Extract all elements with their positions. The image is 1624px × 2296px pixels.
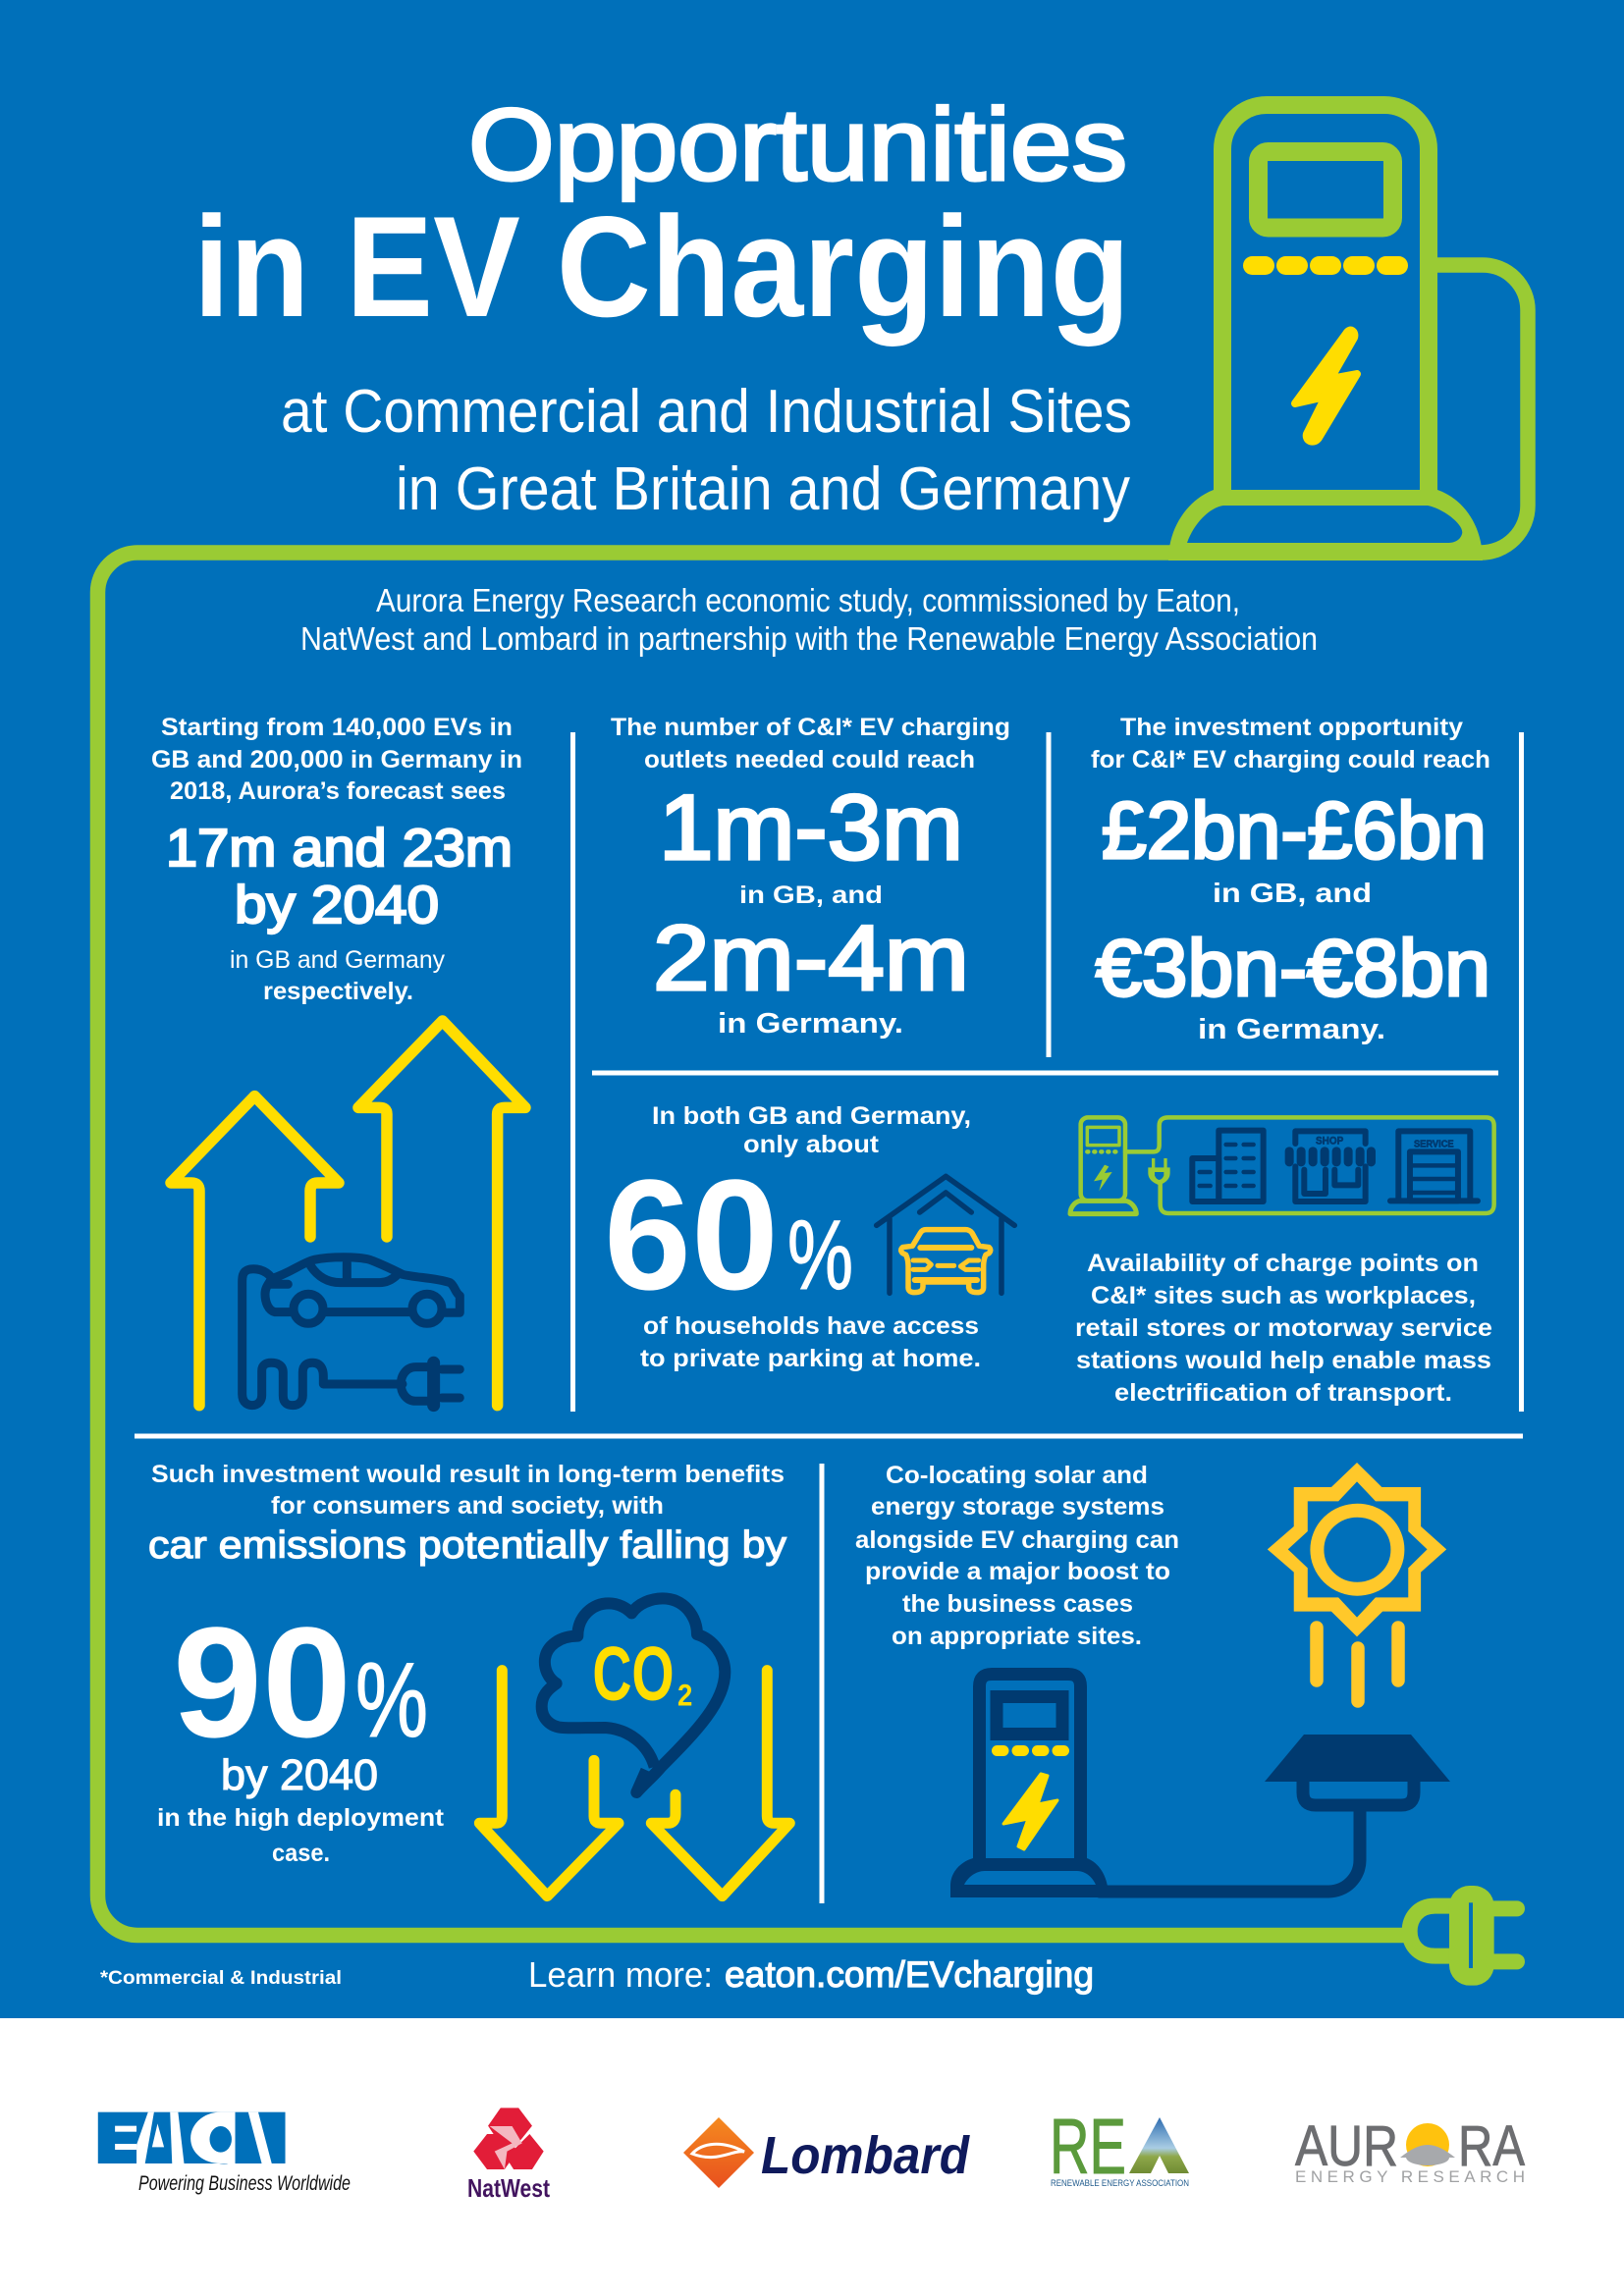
emissions intro: [148, 1461, 787, 1567]
emissions intro: Such investment would result in long-term benefits: [151, 1461, 785, 1488]
logo: REA: RENEWABLE ENERGY ASSOCIATION: [1051, 2178, 1189, 2188]
logo: NatWest: NatWest: [467, 2173, 550, 2203]
charging cable and plug: [243, 1269, 460, 1406]
down arrows: [479, 1671, 789, 1896]
service station: [1390, 1131, 1478, 1201]
learn more link: Learn more:: [528, 1954, 713, 1995]
GB outlets figure: 1m-3m: [659, 775, 963, 879]
CO2 label: 2: [677, 1678, 692, 1713]
logo: Aurora: RA: [1458, 2114, 1525, 2178]
logo: REA: RE: [1050, 2103, 1126, 2190]
logo: Aurora: ENERGY RESEARCH: [1295, 2167, 1525, 2186]
forecast intro text: GB and 200,000 in Germany in: [151, 746, 522, 774]
panel: private parking: [604, 1102, 1014, 1372]
outlets intro: The number of C&I* EV charging: [611, 714, 1010, 741]
solar text: Co-locating solar and: [886, 1462, 1148, 1489]
logo: Aurora: [1295, 2114, 1525, 2186]
title line 1: Opportunities: [468, 88, 1127, 202]
solar text: provide a major boost to: [865, 1558, 1170, 1585]
indicator dots: [1243, 256, 1408, 275]
Germany label: in Germany.: [718, 1008, 903, 1040]
shop: SHOP: [1316, 1136, 1344, 1148]
intro text: Aurora Energy Research economic study, commissioned by Eaton,: [376, 582, 1240, 618]
forecast intro text: [151, 714, 522, 805]
forecast note: in GB and Germany: [230, 946, 445, 974]
availability text: stations would help enable mass: [1076, 1347, 1491, 1374]
intro text: NatWest and Lombard in partnership with the Renewable Energy Association: [300, 620, 1318, 657]
icon: large charging station: [1168, 105, 1483, 561]
forecast figures: [166, 819, 513, 934]
logo: Lombard: Lombard: [761, 2126, 970, 2185]
emissions intro: car emissions potentially falling by: [148, 1524, 787, 1567]
Germany outlets figure: 2m-4m: [653, 906, 969, 1009]
solar text: alongside EV charging can: [855, 1526, 1179, 1554]
panel: EV forecast: [151, 714, 525, 1406]
60 percent figure: %: [787, 1201, 853, 1310]
icon: car in garage: [877, 1176, 1014, 1293]
90 percent figure: [173, 1594, 428, 1770]
emissions note: by 2040: [221, 1751, 378, 1799]
availability text: [1075, 1250, 1492, 1407]
GB label: in GB, and: [1213, 878, 1372, 908]
solar text: [855, 1462, 1179, 1650]
parking note: [640, 1312, 981, 1372]
logo: Eaton: Powering Business Worldwide: [138, 2172, 351, 2195]
CO2 label: CO: [592, 1630, 675, 1717]
icon: sun: [1268, 1463, 1446, 1701]
cloud: [542, 1598, 725, 1792]
investment intro: for C&I* EV charging could reach: [1091, 746, 1490, 774]
icon: rising arrows with electric car: [171, 1021, 525, 1406]
icon: solar panel and cable: [1100, 1735, 1450, 1892]
logo: Eaton: EATON: [98, 2100, 285, 2179]
investment intro: [1091, 714, 1490, 774]
parking note: to private parking at home.: [640, 1345, 981, 1372]
intro text: [300, 582, 1318, 657]
car: [265, 1257, 460, 1323]
logo: Aurora: AUR: [1295, 2114, 1398, 2178]
emissions note: [157, 1751, 445, 1867]
outlets intro: [611, 714, 1010, 774]
small charger and cable: [1070, 1117, 1494, 1214]
Germany investment figure: €3bn-€8bn: [1096, 924, 1490, 1013]
outlets intro: outlets needed could reach: [644, 746, 975, 774]
solar text: on appropriate sites.: [892, 1623, 1142, 1650]
solar text: energy storage systems: [871, 1493, 1164, 1521]
availability text: Availability of charge points on: [1087, 1250, 1479, 1277]
panel: charging outlets: [611, 714, 1010, 1040]
forecast intro text: 2018, Aurora’s forecast sees: [170, 777, 506, 805]
yellow up arrows: [171, 1021, 525, 1406]
dividers: [135, 732, 1524, 1903]
parking intro: In both GB and Germany,: [652, 1102, 971, 1130]
background: white logo strip: [0, 2018, 1624, 2296]
investment intro: The investment opportunity: [1120, 714, 1463, 741]
footnote: *Commercial & Industrial: [100, 1968, 342, 1989]
solar text: the business cases: [902, 1590, 1133, 1618]
GB label: in GB, and: [739, 881, 883, 909]
Germany label: in Germany.: [1198, 1014, 1385, 1045]
title line 2: in EV Charging: [193, 187, 1130, 347]
forecast note: respectively.: [263, 978, 413, 1005]
emissions intro: for consumers and society, with: [271, 1492, 664, 1520]
learn more link: [528, 1954, 1094, 1995]
GB investment figure: £2bn-£6bn: [1102, 786, 1487, 876]
station body: [1222, 105, 1429, 496]
emissions note: case.: [272, 1840, 330, 1867]
learn more link: eaton.com/EVcharging: [725, 1954, 1094, 1995]
icon: navy charging station: [950, 1675, 1109, 1897]
parking intro: only about: [743, 1131, 880, 1158]
panel: solar and storage: [855, 1462, 1450, 1897]
subtitle line 2: in Great Britain and Germany: [396, 455, 1130, 523]
forecast intro text: Starting from 140,000 EVs in: [161, 714, 513, 741]
service station: SERVICE: [1414, 1140, 1454, 1150]
availability text: C&I* sites such as workplaces,: [1091, 1282, 1476, 1309]
emissions note: in the high deployment: [157, 1804, 445, 1832]
icon: charger connected to sites: [1070, 1117, 1494, 1214]
icon: CO2 cloud with down arrows: [479, 1598, 789, 1896]
office building: [1192, 1131, 1264, 1201]
subtitle line 1: at Commercial and Industrial Sites: [281, 378, 1132, 446]
station screen: [1259, 151, 1392, 228]
green frame cable: [98, 265, 1528, 1936]
icon: frame end plug: [1410, 1886, 1517, 1986]
forecast figures: 17m and 23m: [166, 819, 513, 878]
shop: [1285, 1131, 1376, 1201]
90 percent figure: 90: [173, 1594, 352, 1770]
forecast figures: by 2040: [235, 876, 439, 934]
parking intro: [652, 1102, 971, 1158]
panel: charge point availability: [1070, 1117, 1494, 1407]
availability text: retail stores or motorway service: [1075, 1314, 1492, 1342]
availability text: electrification of transport.: [1114, 1379, 1452, 1407]
90 percent figure: %: [355, 1640, 428, 1759]
logo: Lombard: [683, 2117, 970, 2188]
panel: emissions: [148, 1461, 789, 1896]
panel: investment opportunity: [1091, 714, 1490, 1045]
title block: [193, 88, 1132, 523]
lightning bolt: [1295, 331, 1357, 442]
forecast note: [230, 946, 445, 1005]
60 percent figure: 60: [604, 1147, 779, 1322]
logo block: [98, 2112, 286, 2163]
station base: [1168, 490, 1483, 561]
parking note: of households have access: [643, 1312, 979, 1340]
logo: NatWest: [467, 2108, 550, 2203]
